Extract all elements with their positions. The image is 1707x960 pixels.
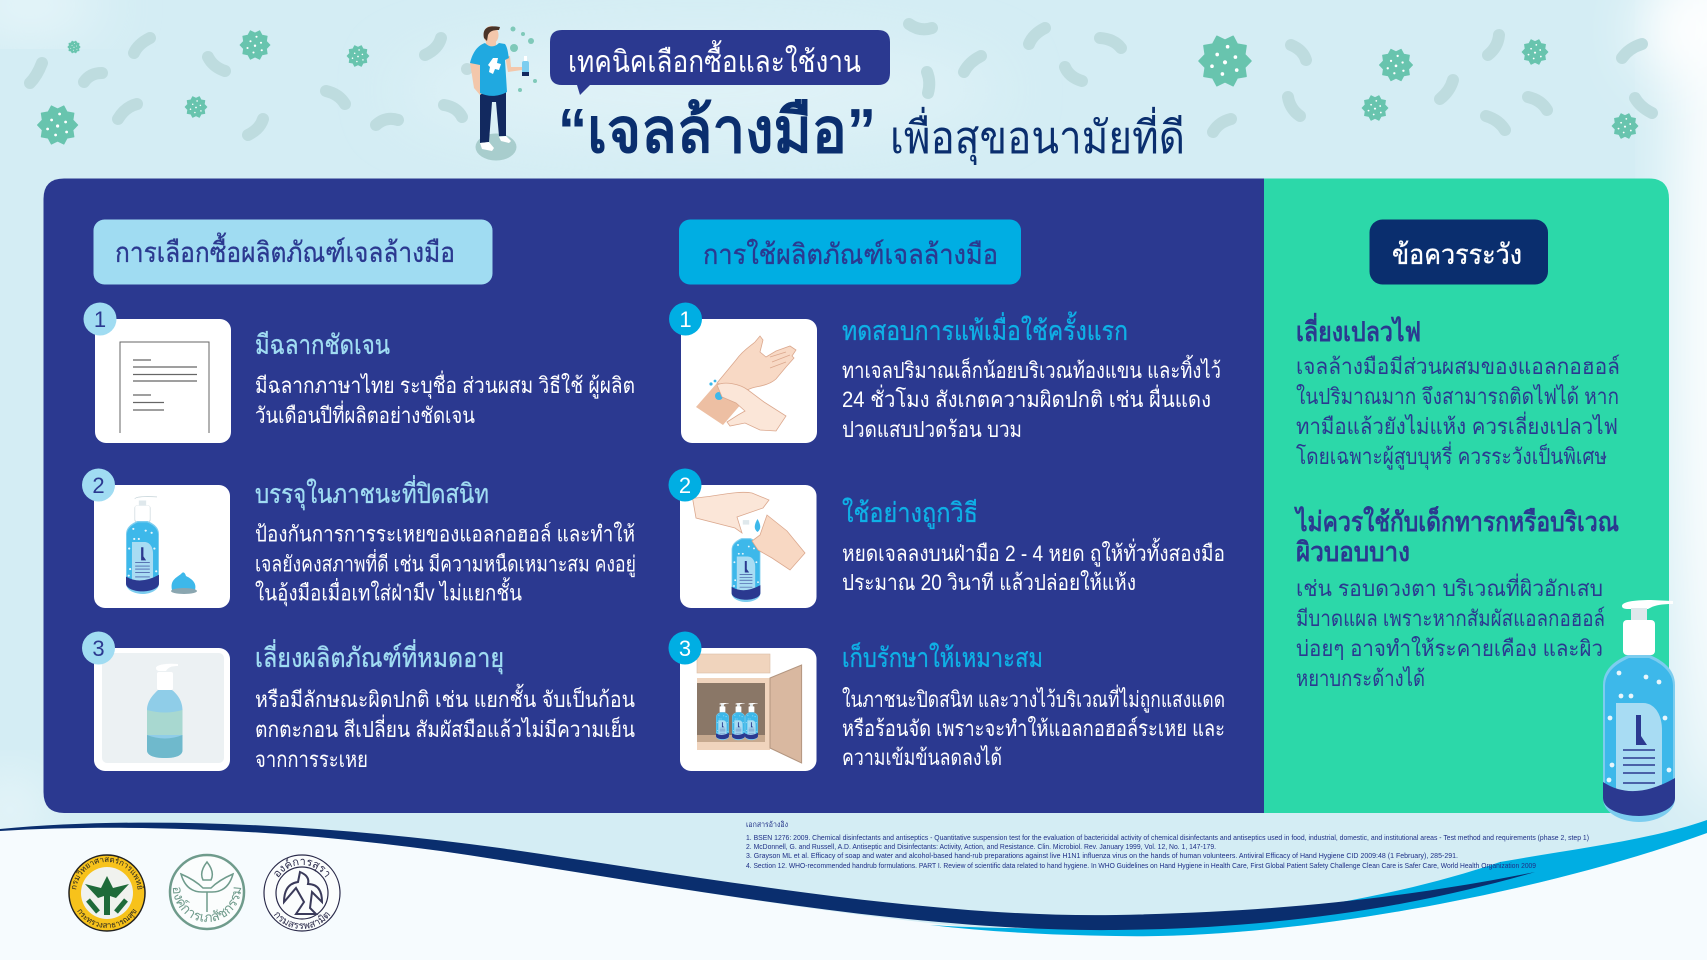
references: 3. Grayson ML et al. Efficacy of soap and water and alcohol-based hand-rub preparations against live H1N1 influenza virus on the hands of human volunteers. Antiviral Efficacy of Hand Hygiene CID 2009:48 (1 February), 285-291. bbox=[746, 851, 1458, 860]
item 1 text: 24 ชั่วโมง สังเกตความผิดปกติ เช่น ผื่นแดง bbox=[842, 384, 1211, 412]
card: label document bbox=[95, 319, 231, 443]
item 1 text: ทดสอบการแพ้เมื่อใช้ครั้งแรก bbox=[842, 311, 1128, 346]
item 2 text: ป้องกันการการระเหยของแอลกอฮอล์ และทำให้ bbox=[255, 522, 635, 546]
card: expired bottle bbox=[94, 648, 230, 771]
caution: sensitive skin: มีบาดแผล เพราะหากสัมผัสแอลกอฮอล์ bbox=[1296, 606, 1605, 631]
caution: sensitive skin: เช่น รอบดวงตา บริเวณที่ผิวอักเสบ bbox=[1296, 573, 1603, 601]
panel: cautions column bbox=[1293, 220, 1675, 822]
panel: usage column bbox=[668, 220, 1225, 771]
bottom white band bbox=[0, 828, 1707, 960]
number 1: 1 bbox=[94, 307, 106, 332]
card: sealed bottle bbox=[94, 485, 230, 608]
item 3 text: เก็บรักษาให้เหมาะสม bbox=[842, 640, 1043, 673]
item 1 text: ทาเจลปริมาณเล็กน้อยบริเวณท้องแขน และทิ้งไว้ bbox=[842, 355, 1221, 383]
person with sanitizer bottle bbox=[461, 26, 537, 160]
caution: flames: เลี่ยงเปลวไฟ bbox=[1296, 312, 1421, 347]
caution: flames: ในปริมาณมาก จึงสามารถติดไฟได้ หาก bbox=[1296, 384, 1619, 409]
item 2 text: ประมาณ 20 วินาที แล้วปล่อยให้แห้ง bbox=[842, 570, 1136, 595]
heading: cautions bbox=[1370, 220, 1548, 284]
logo: government pharmaceutical organization: องค์การเภสัชกรรม bbox=[172, 887, 242, 922]
references: 4. Section 12. WHO-recommended handrub formulations. PART I. Review of scientific data related to hand hygiene. In WHO Guidelines on Hand Hygiene in Health Care, First Global Patient Safety Challenge Clean Care is Safer Care, World Health Organization 2009 bbox=[746, 861, 1536, 870]
item 2 text bbox=[842, 497, 1225, 595]
card: storage cabinet bbox=[680, 648, 816, 771]
item 3 text: จากการระเหย bbox=[255, 747, 368, 772]
logo: government pharmaceutical organization bbox=[168, 854, 246, 930]
number 2: 2 bbox=[679, 473, 691, 498]
caution: flames: เจลล้างมือมีส่วนผสมของแอลกอฮอล์ bbox=[1296, 354, 1620, 379]
caution: sensitive skin: ผิวบอบบาง bbox=[1296, 537, 1410, 567]
title: เพื่อสุขอนามัยที่ดี bbox=[890, 106, 1185, 165]
item 3 text: เลี่ยงผลิตภัณฑ์ที่หมดอายุ bbox=[255, 639, 504, 675]
item 2 text: เจลยังคงสภาพที่ดี เช่น มีความหนืดเหมาะสม คงอยู่ bbox=[255, 548, 636, 578]
caution: sensitive skin: หยาบกระด้างได้ bbox=[1296, 666, 1425, 691]
caution: sensitive skin: บ่อยๆ อาจทำให้ระคายเคือง และผิว bbox=[1296, 636, 1603, 661]
icon: large sanitizer bottle bbox=[1603, 600, 1675, 822]
caution: sensitive skin bbox=[1293, 504, 1619, 691]
item 1 text: มีฉลากชัดเจน bbox=[255, 330, 390, 360]
heading: choosing: การเลือกซื้อผลิตภัณฑ์เจลล้างมือ bbox=[115, 232, 455, 268]
title: “เจลล้างมือ” bbox=[558, 97, 876, 166]
heading: cautions: ข้อควรระวัง bbox=[1392, 239, 1522, 270]
logo: department of medical sciences bbox=[68, 854, 146, 932]
item 3 text bbox=[255, 639, 635, 772]
decorative viruses bbox=[38, 31, 1638, 144]
number 2 bbox=[82, 468, 115, 502]
navy swoosh bbox=[0, 823, 1535, 930]
number 3: 3 bbox=[92, 636, 105, 661]
item 3 text: ความเข้มข้นลดลงได้ bbox=[842, 745, 1002, 770]
item 2 text bbox=[255, 475, 636, 606]
panel: choosing column bbox=[82, 220, 636, 772]
item 3 text: ตกตะกอน สีเปลี่ยน สัมผัสมือแล้วไม่มีความเย็น bbox=[255, 714, 635, 742]
panel: cautions green bbox=[1264, 178, 1669, 813]
title speech bubble bbox=[550, 30, 890, 95]
item 3 text: หรือมีลักษณะผิดปกติ เช่น แยกชั้น จับเป็นก้อน bbox=[255, 684, 635, 712]
decorative bacteria bbox=[30, 24, 1652, 135]
heading: choosing bbox=[94, 220, 492, 284]
logo: excise department liquor distillery bbox=[263, 854, 341, 932]
number 1 bbox=[669, 302, 702, 336]
item 2 text: หยดเจลลงบนฝ่ามือ 2 - 4 หยด ถูให้ทั่วทั้งสองมือ bbox=[842, 538, 1225, 567]
number 1: 1 bbox=[679, 307, 692, 332]
heading: usage bbox=[679, 220, 1021, 284]
logo: department of medical sciences: กระทรวงสาธารณสุข bbox=[77, 908, 137, 928]
item 1 text bbox=[255, 330, 635, 428]
item 1 text bbox=[842, 311, 1221, 442]
card: allergy test hands bbox=[681, 319, 817, 443]
references: 1. BSEN 1276: 2009. Chemical disinfectants and antiseptics - Quantitative suspension test for the evaluation of bactericidal activity of chemical disinfectants and antiseptics used in food, industrial, domestic, and institutional areas - Test method and requirements (phase 2, step 1) bbox=[746, 833, 1589, 842]
cyan swoosh bbox=[930, 820, 1707, 936]
number 3 bbox=[82, 632, 115, 664]
item 2 text: ใช้อย่างถูกวิธี bbox=[842, 497, 978, 529]
item 1 text: ปวดแสบปวดร้อน บวม bbox=[842, 417, 1022, 442]
number 2 bbox=[668, 468, 702, 502]
references: 2. McDonnell, G. and Russell, A.D. Antiseptic and Disinfectants: Activity, Action, and Resistance. Clin. Microbiol. Rev. January 1999, Vol. 12, No. 1, 147-179. bbox=[746, 842, 1216, 851]
item 3 text: หรือร้อนจัด เพราะจะทำให้แอลกอฮอล์ระเหย และ bbox=[842, 716, 1225, 741]
item 1 text: วันเดือนปีที่ผลิตอย่างชัดเจน bbox=[255, 400, 475, 428]
caution: flames: โดยเฉพาะผู้สูบบุหรี่ ควรระวังเป็นพิเศษ bbox=[1296, 441, 1607, 470]
heading: usage: การใช้ผลิตภัณฑ์เจลล้างมือ bbox=[703, 238, 998, 270]
card: pumping gel bbox=[680, 485, 816, 608]
references bbox=[746, 820, 1589, 870]
caution: sensitive skin: ไม่ควรใช้กับเด็กทารกหรือบริเวณ bbox=[1293, 504, 1619, 537]
references: เอกสารอ้างอิง bbox=[746, 820, 788, 829]
caution: flames bbox=[1296, 312, 1620, 470]
number 2: 2 bbox=[92, 473, 105, 498]
logo: excise department liquor distillery: องค์การสุรา bbox=[274, 858, 330, 878]
title bbox=[550, 30, 1185, 166]
logo: department of medical sciences: กรมวิทยาศาสตร์การแพทย์ bbox=[72, 857, 144, 890]
panel: main navy bbox=[44, 178, 1264, 813]
caution: flames: ทามือแล้วยังไม่แห้ง ควรเลี่ยงเปลวไฟ bbox=[1296, 411, 1618, 439]
number 3: 3 bbox=[679, 636, 691, 661]
item 2 text: บรรจุในภาชนะที่ปิดสนิท bbox=[255, 475, 489, 511]
item 3 text bbox=[842, 640, 1225, 770]
item 3 text: ในภาชนะปิดสนิท และวางไว้บริเวณที่ไม่ถูกแสงแดด bbox=[842, 684, 1225, 713]
item 2 text: ในอุ้งมือเมื่อเทใส่ฝ่ามืv ไม่แยกชั้น bbox=[255, 578, 522, 606]
number 1 bbox=[84, 302, 116, 336]
number 3 bbox=[668, 632, 702, 664]
title: เทคนิคเลือกซื้อและใช้งาน bbox=[568, 40, 861, 79]
item 1 text: มีฉลากภาษาไทย ระบุชื่อ ส่วนผสม วิธีใช้ ผู้ผลิต bbox=[255, 370, 635, 399]
logo: excise department liquor distillery: กรมสรรพสามิต bbox=[274, 912, 330, 929]
